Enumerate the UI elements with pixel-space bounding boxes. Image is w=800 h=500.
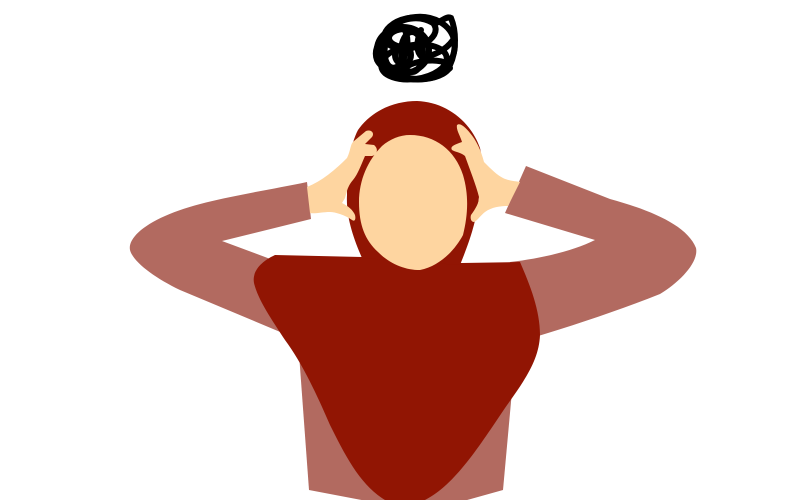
scribble above head xyxy=(374,11,460,85)
hijab drape xyxy=(254,255,540,500)
right hand xyxy=(451,124,520,222)
face xyxy=(359,135,467,270)
hijab head xyxy=(347,101,482,265)
torso xyxy=(298,340,513,500)
left hand xyxy=(307,130,377,221)
sleeves and body xyxy=(130,166,696,500)
left sleeve xyxy=(130,182,311,334)
hijab xyxy=(254,101,540,500)
right sleeve xyxy=(505,166,696,337)
